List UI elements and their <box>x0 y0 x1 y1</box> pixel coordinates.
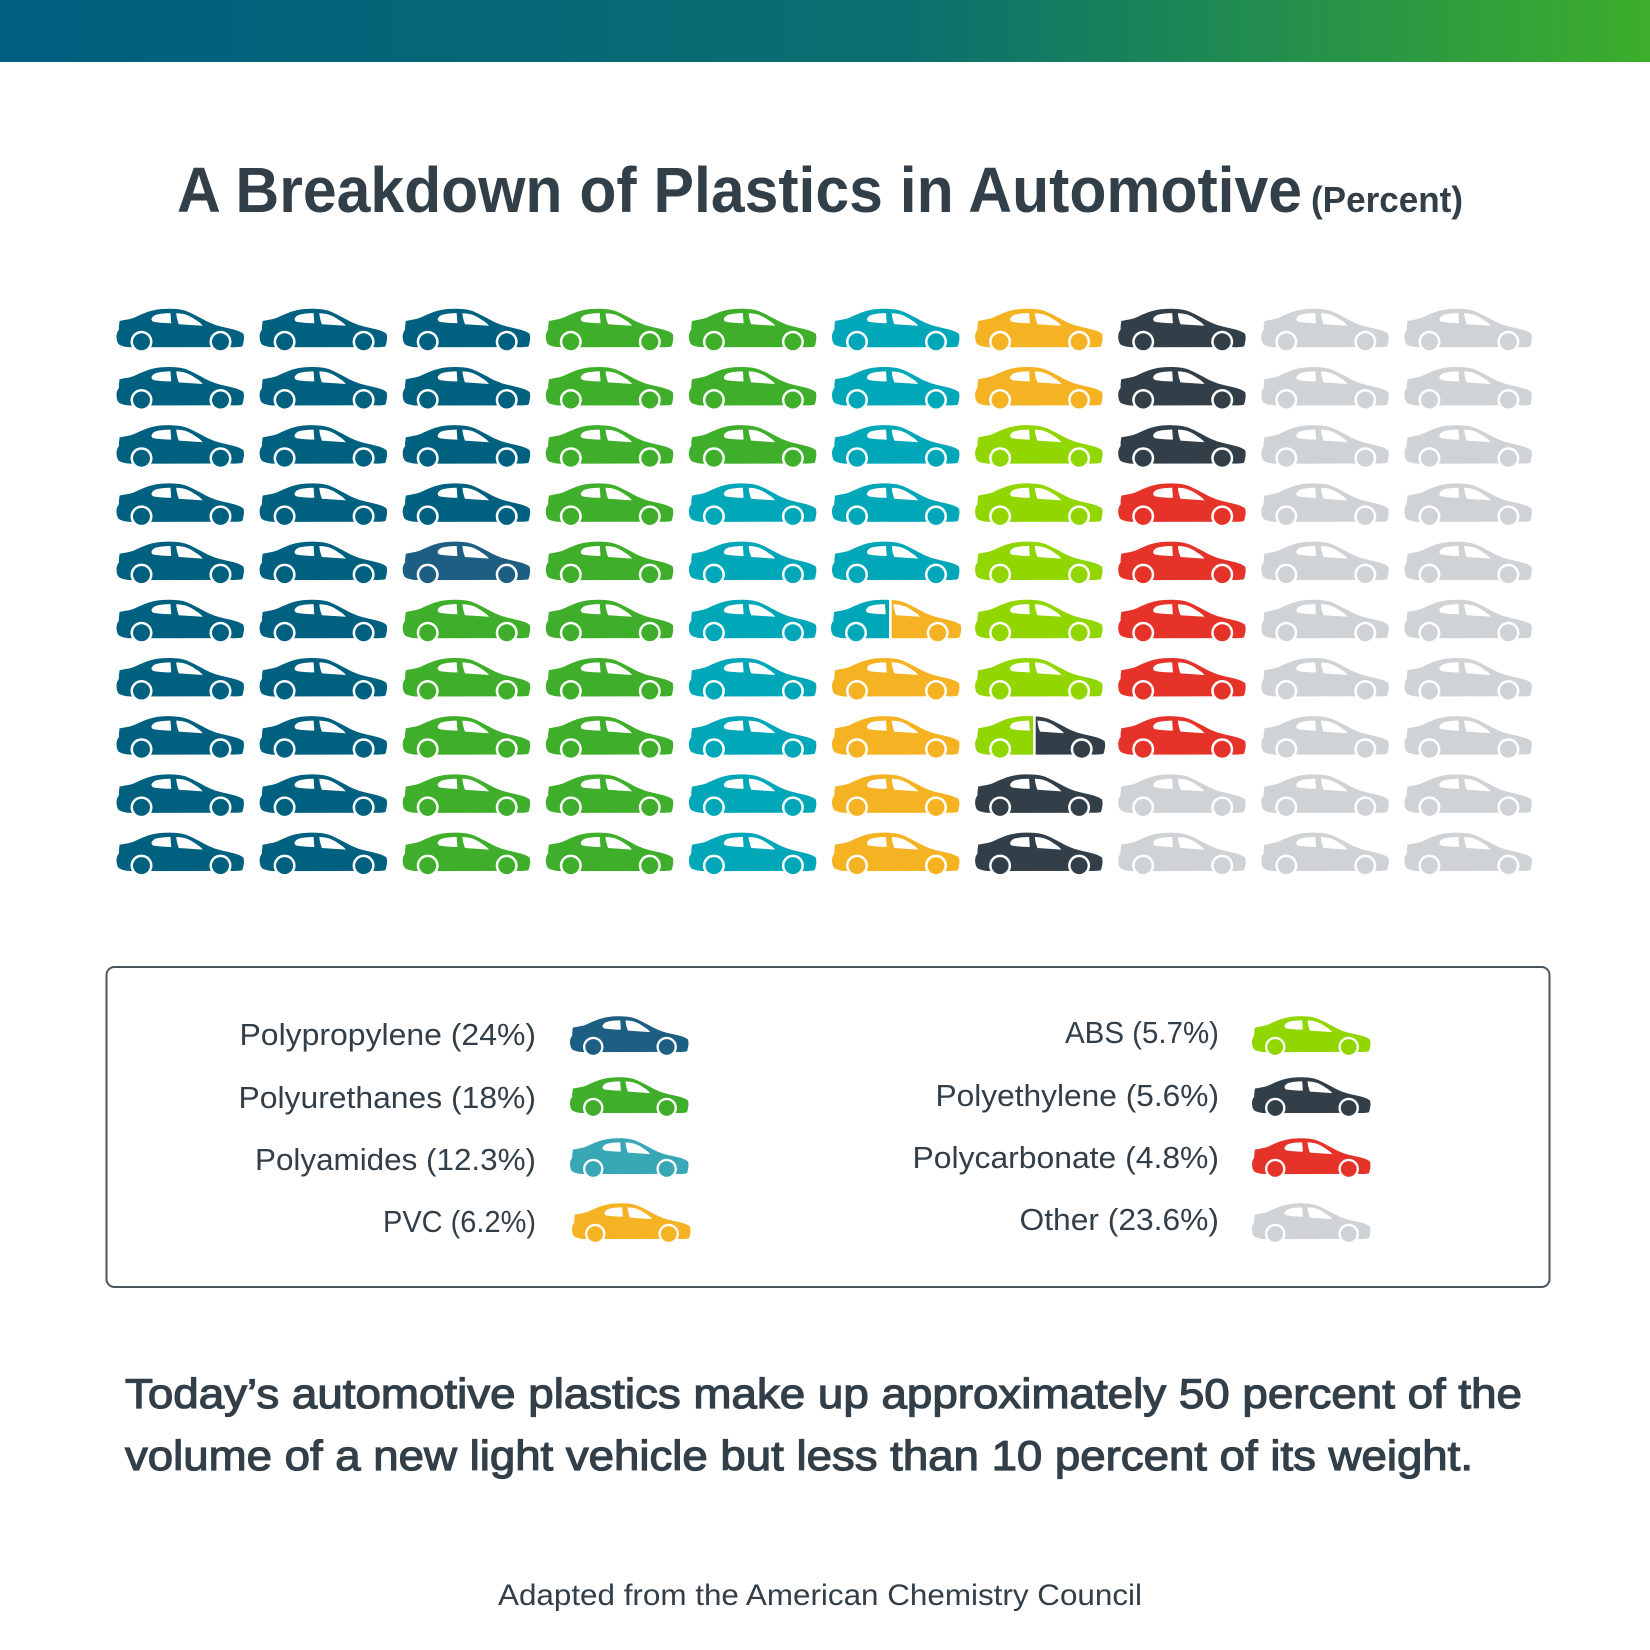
legend item: other: Other (23.6%) <box>1020 1202 1219 1237</box>
cars: polyethylene <box>975 309 1246 877</box>
legend item: polypropylene <box>240 1016 688 1057</box>
cars: ABS <box>975 425 1103 702</box>
title: A Breakdown of Plastics in Automotive <box>177 154 1302 226</box>
legend item: polyamides <box>255 1138 688 1179</box>
split car: ABS and polyethylene <box>975 716 1105 760</box>
cars: polycarbonate <box>1118 483 1246 760</box>
statement text <box>125 1370 1522 1479</box>
legend item: polyethylene <box>936 1077 1370 1118</box>
pictogram chart: 100 cars <box>116 309 1532 877</box>
legend item: ABS: ABS (5.7%) <box>1065 1015 1219 1050</box>
legend item: PVC <box>383 1203 690 1244</box>
legend item: polyurethanes: Polyurethanes (18%) <box>238 1080 536 1115</box>
cars: PVC <box>832 309 1103 877</box>
legend item: polyamides: Polyamides (12.3%) <box>255 1142 536 1177</box>
cars: polypropylene <box>116 309 530 877</box>
cars: other <box>1118 309 1532 877</box>
legend item: polycarbonate <box>912 1138 1370 1179</box>
legend item: polyethylene: Polyethylene (5.6%) <box>936 1078 1219 1113</box>
statement text: volume of a new light vehicle but less than 10 percent of its weight. <box>125 1432 1473 1479</box>
legend frame <box>106 967 1550 1287</box>
legend item: polypropylene: Polypropylene (24%) <box>240 1017 536 1052</box>
statement text: Today’s automotive plastics make up approximately 50 percent of the <box>125 1370 1522 1417</box>
legend item: ABS <box>1065 1015 1370 1057</box>
legend item: other <box>1020 1202 1370 1244</box>
cars: polyurethanes <box>403 309 816 877</box>
source note: Adapted from the American Chemistry Council <box>498 1579 1142 1612</box>
legend item: polyurethanes <box>238 1077 688 1118</box>
split car: polyamides and PVC <box>831 600 961 644</box>
legend item: PVC: PVC (6.2%) <box>383 1204 536 1239</box>
panel: legend <box>106 967 1550 1287</box>
title: (Percent) <box>1311 179 1463 220</box>
cars: polyamides <box>689 309 959 877</box>
legend item: polycarbonate: Polycarbonate (4.8%) <box>912 1140 1219 1175</box>
top gradient bar <box>0 0 1650 62</box>
